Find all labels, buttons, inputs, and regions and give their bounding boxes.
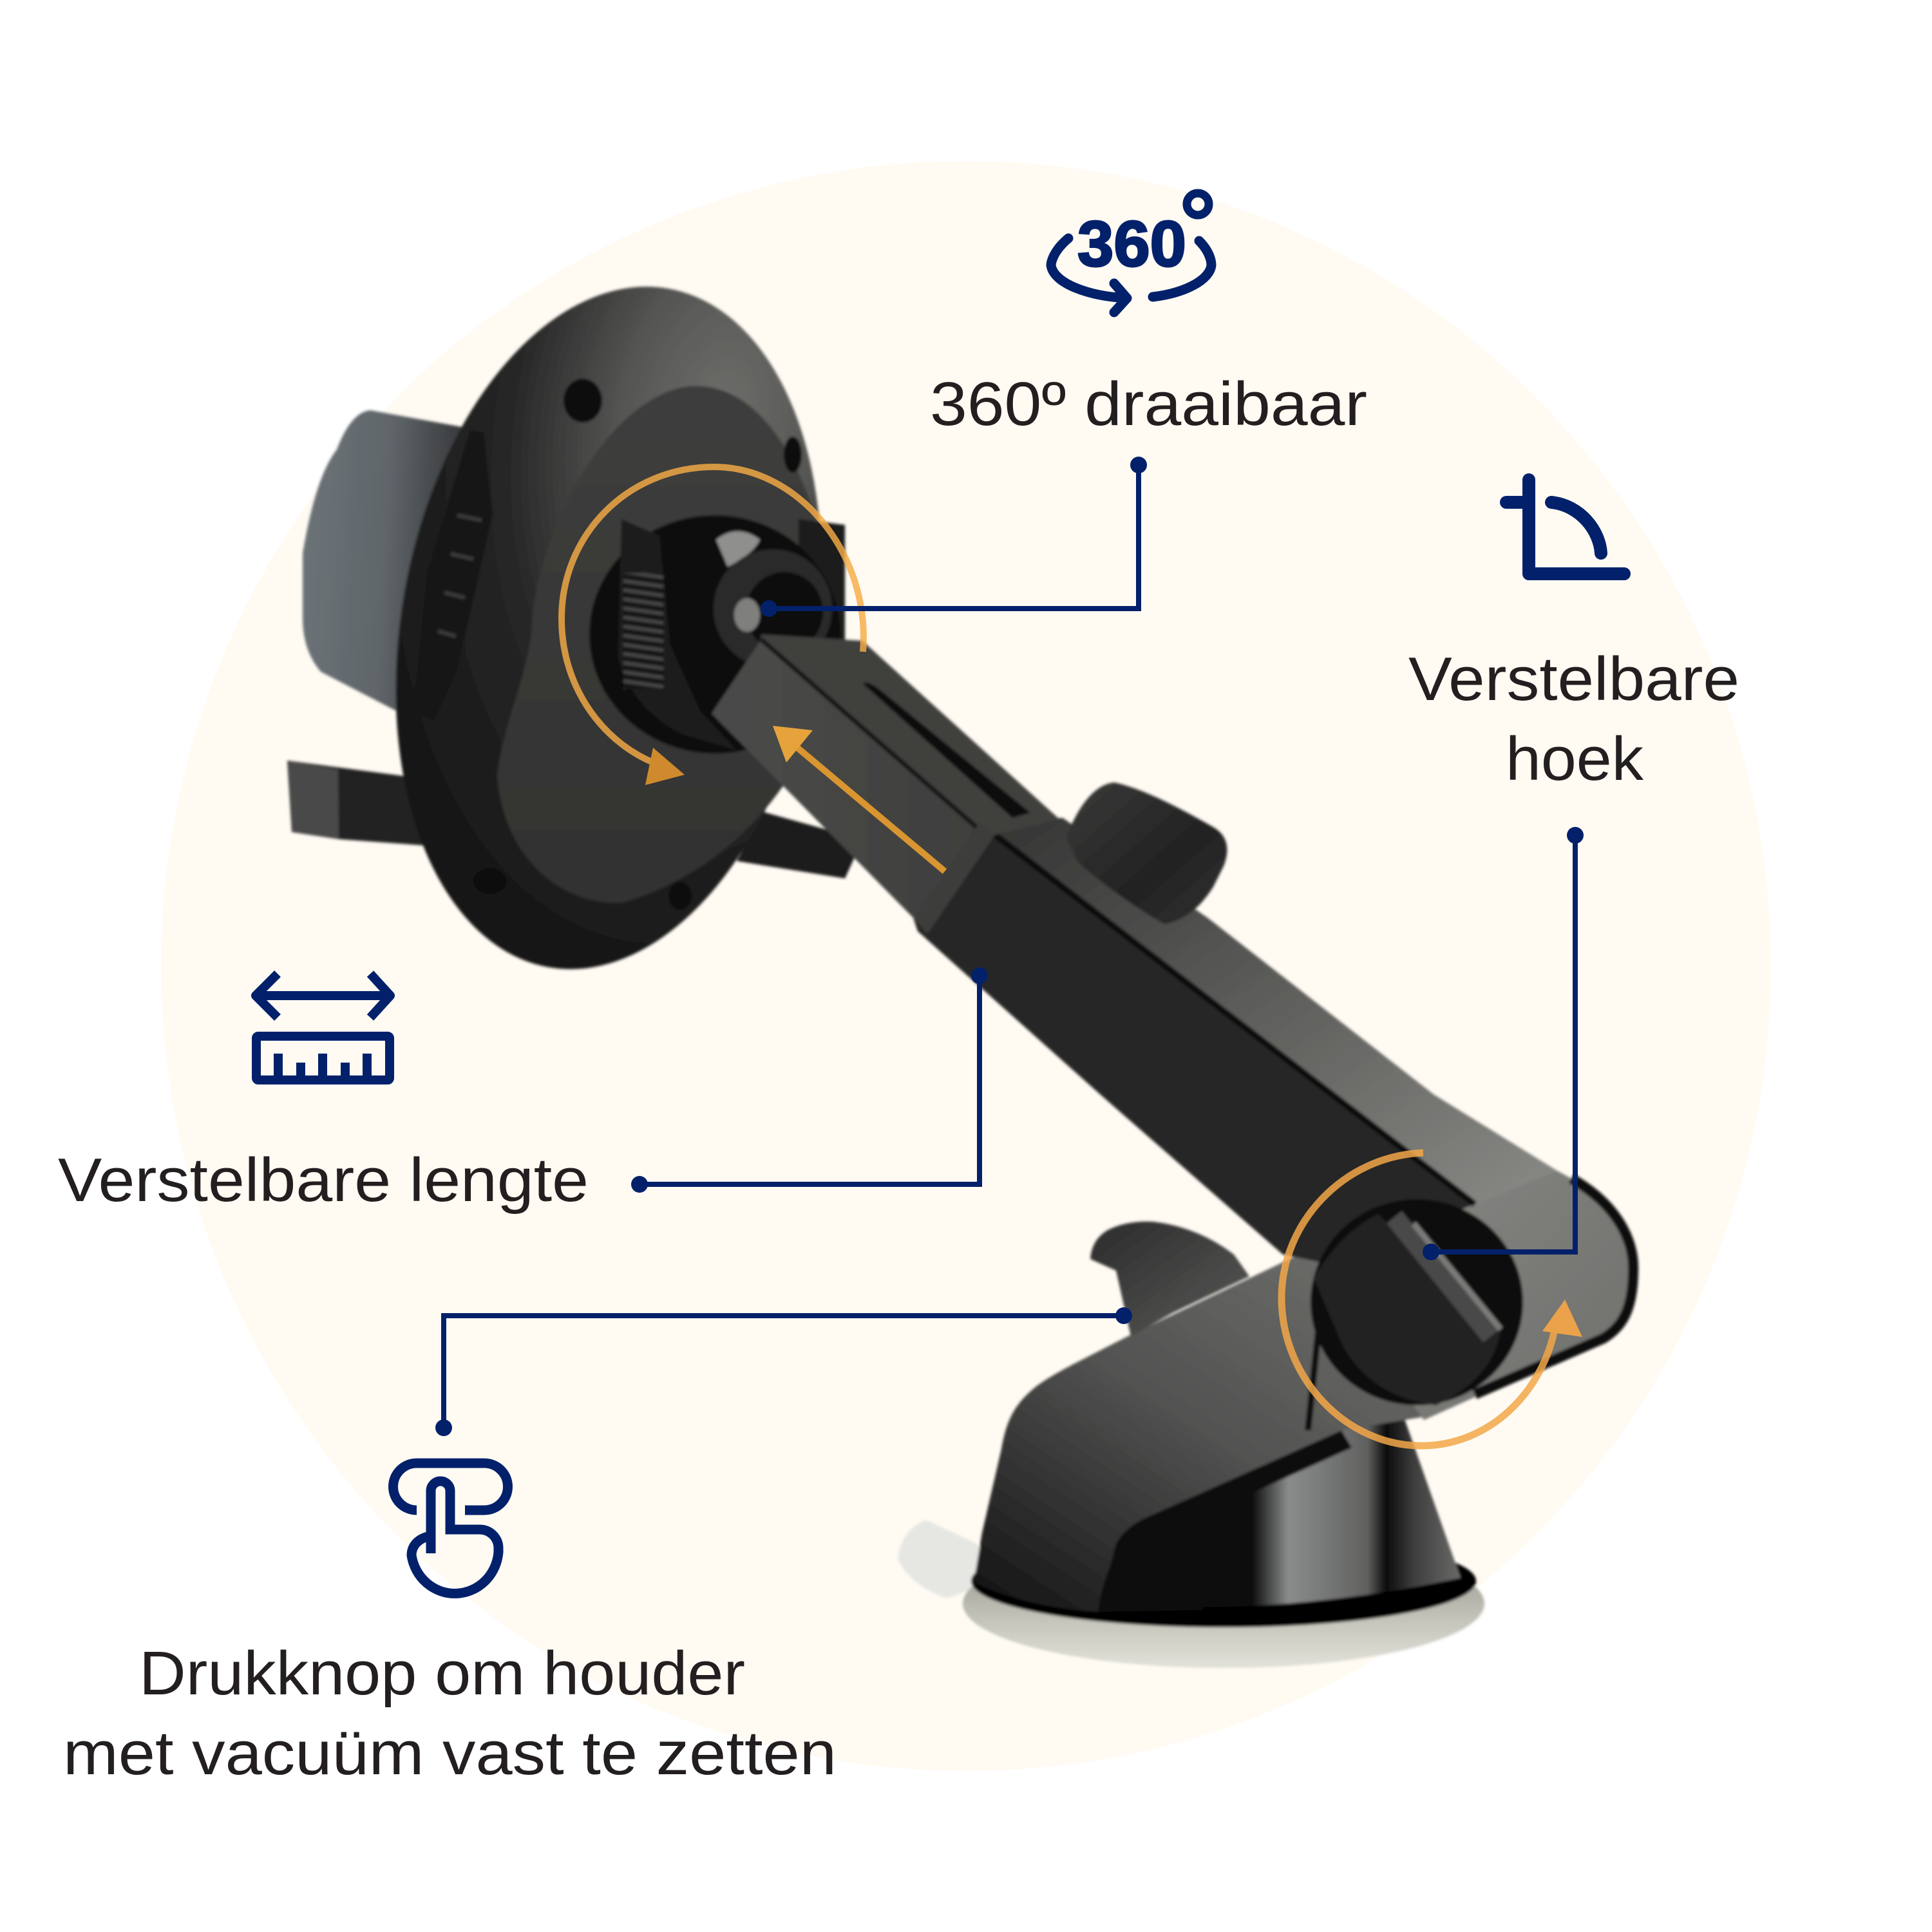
right foot of cradle xyxy=(737,812,858,878)
label: Verstelbare hoek: Verstelbare xyxy=(1408,645,1739,714)
connector: adjustable length xyxy=(631,967,988,1193)
label: Verstelbare lengte: Verstelbare lengte xyxy=(58,1146,589,1215)
orange rotation arrow: head xyxy=(562,467,864,785)
icon: 360 degrees xyxy=(1051,193,1211,312)
icon: finger press xyxy=(393,1463,507,1593)
label: Drukknop om houder met vacuüm vast te zetten xyxy=(63,1639,837,1788)
orange rotation arrow: pivot xyxy=(1282,1153,1582,1446)
mounting holes xyxy=(473,379,802,910)
connector: push button xyxy=(435,1307,1132,1436)
cylinder rim xyxy=(1475,1179,1633,1394)
small bracket xyxy=(799,519,845,650)
label: 360 draaibaar: 360º draaibaar xyxy=(930,370,1367,439)
inner telescopic arm xyxy=(712,634,1059,918)
foot arm xyxy=(974,1243,1424,1612)
icon: ruler with arrow xyxy=(256,974,390,1080)
label: Verstelbare hoek: hoek xyxy=(1506,724,1644,793)
side pad xyxy=(303,410,466,716)
cylinder end of arm xyxy=(1327,1095,1636,1420)
telescopic sleeve xyxy=(913,818,1557,1262)
label: Drukknop om houder met vacuüm vast te zetten: Drukknop om houder xyxy=(139,1639,745,1708)
label: Drukknop om houder met vacuüm vast te zetten: met vacuüm vast te zetten xyxy=(63,1719,837,1788)
background circle xyxy=(161,161,1771,1771)
inner raised disc xyxy=(497,386,837,903)
push button hook xyxy=(1090,1222,1249,1336)
foot arm seam xyxy=(1308,1305,1321,1430)
icon: angle xyxy=(1506,480,1624,574)
ball joint xyxy=(589,515,840,753)
sleeve end face xyxy=(913,823,995,934)
thumb screw on sleeve xyxy=(1066,782,1227,924)
lower band of foot xyxy=(1098,1430,1352,1612)
icon: 360 degrees: 360 xyxy=(1077,208,1186,280)
suction cup xyxy=(898,1520,1484,1668)
left foot of cradle xyxy=(287,761,470,849)
product: phone holder photo xyxy=(287,252,1636,1668)
ribbed clamp xyxy=(413,430,493,721)
connector: adjustable angle xyxy=(1423,827,1584,1260)
base dome xyxy=(971,1372,1476,1627)
pivot knob xyxy=(1311,1199,1523,1405)
back disc xyxy=(345,252,873,1003)
connector: 360 rotation xyxy=(761,457,1147,617)
label: Verstelbare hoek xyxy=(1408,645,1739,793)
orange length arrow xyxy=(773,726,945,871)
